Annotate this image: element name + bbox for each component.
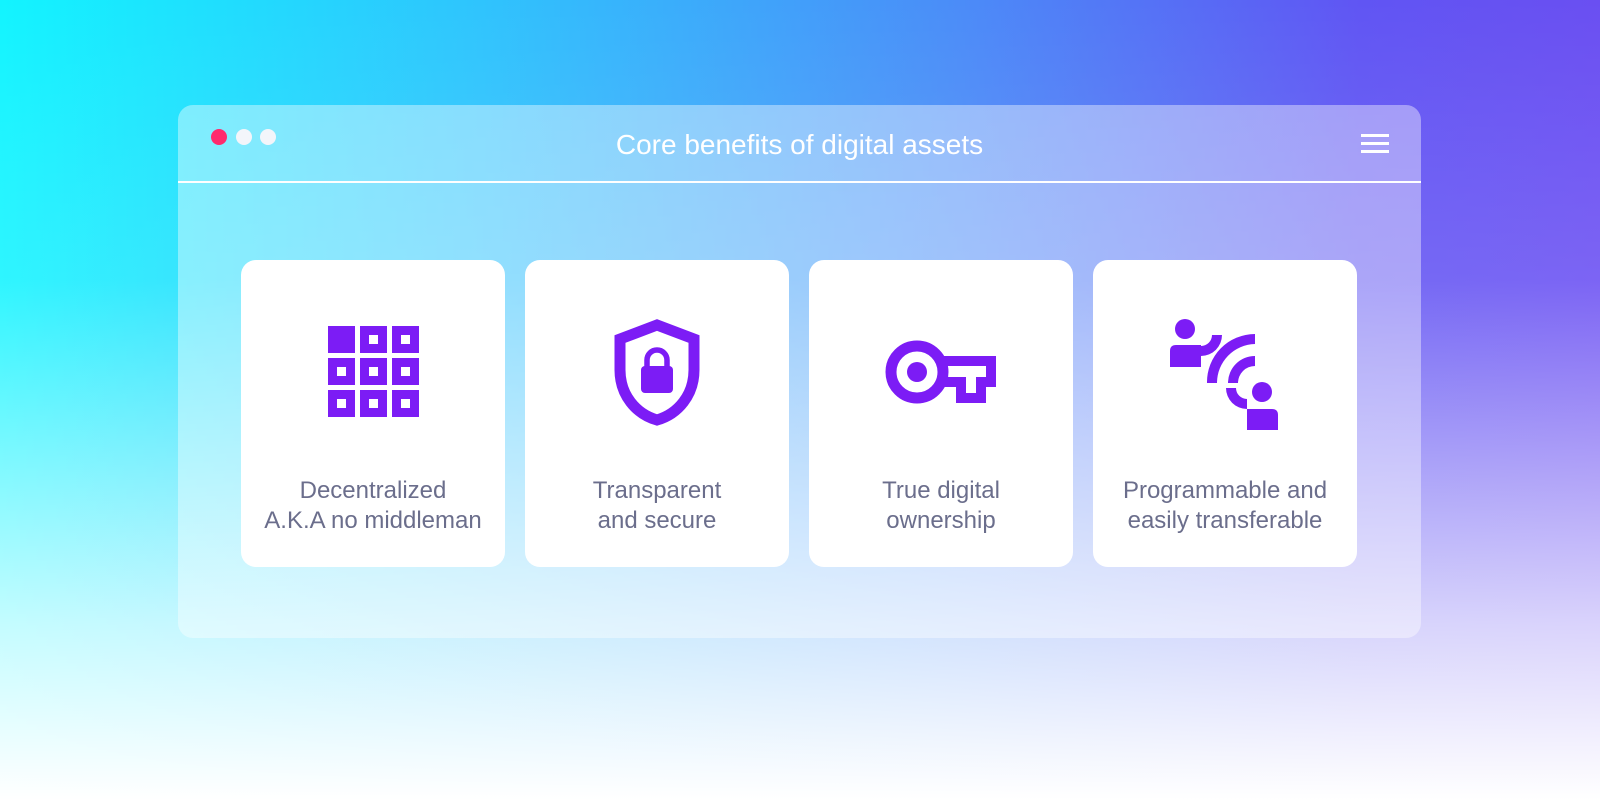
label text: Programmable and	[1123, 477, 1327, 504]
label text	[593, 477, 722, 534]
icon: key	[886, 340, 996, 404]
label text: A.K.A no middleman	[264, 507, 482, 534]
icon: grid	[328, 326, 419, 417]
icon: shield with lock	[614, 319, 700, 426]
label text: ownership	[886, 507, 996, 534]
window dots	[211, 129, 276, 145]
label text	[264, 477, 482, 534]
label text: True digital	[882, 477, 1000, 504]
window panel	[178, 105, 1421, 638]
label text: Transparent	[593, 477, 721, 504]
label text	[1123, 477, 1327, 534]
label text: Decentralized	[300, 477, 446, 504]
card: decentralized	[241, 260, 505, 567]
card: ownership	[809, 260, 1073, 567]
header bar	[178, 105, 1421, 183]
label text	[882, 477, 1000, 534]
icon: people transfer	[1170, 319, 1278, 430]
label text: and secure	[598, 507, 716, 534]
card: transparent	[525, 260, 789, 567]
card: programmable	[1093, 260, 1357, 567]
label text: easily transferable	[1128, 507, 1322, 534]
title: Core benefits of digital assets	[616, 129, 983, 160]
icon: hamburger menu	[1361, 134, 1389, 153]
